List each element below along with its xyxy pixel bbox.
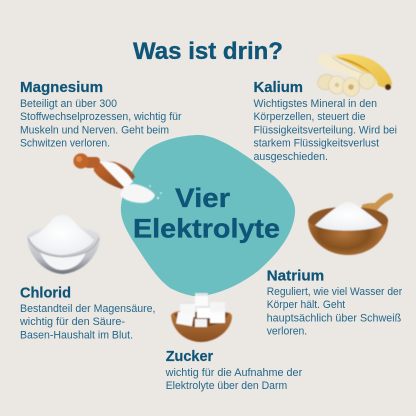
panel: Magnesium (20, 79, 182, 150)
panel: Natrium: Reguliert, wie viel Wasser der (267, 286, 403, 298)
panel: Kalium: Flüssigkeitsverteilung. Wird bei (254, 124, 397, 136)
panel: Zucker: Zucker (166, 348, 213, 365)
panel: Chlorid: Chlorid (20, 284, 71, 302)
panel: Natrium: verloren. (267, 326, 307, 338)
panel: Magnesium: Magnesium (20, 79, 103, 96)
icon: banana (315, 53, 392, 96)
panel: Natrium: Natrium (267, 268, 324, 284)
panel: Magnesium: Beteiligt an über 300 (20, 98, 117, 110)
panel: Chlorid: Basen-Haushalt im Blut. (20, 329, 133, 341)
panel: Zucker (165, 348, 303, 392)
central teal blob (121, 135, 295, 296)
panel: Kalium: starkem Flüssigkeitsverlust (254, 138, 379, 150)
panel: Kalium: Kalium (254, 79, 303, 96)
center heading: Vier Elektrolyte: Vier (175, 183, 231, 213)
panel: Natrium: Körper hält. Geht (267, 299, 345, 311)
panel: Zucker: wichtig für die Aufnahme der (165, 367, 303, 379)
panel: Kalium: Wichtigstes Mineral in den (254, 98, 377, 110)
icon: wooden scoop with salt (73, 153, 162, 203)
icon: wooden bowl with salt (308, 193, 393, 255)
panel: Magnesium: Schwitzen verloren. (20, 138, 110, 150)
panel: Kalium (254, 79, 397, 163)
panel: Magnesium: Muskeln und Nerven. Geht beim (20, 124, 169, 136)
panel: Natrium (267, 268, 403, 338)
center heading: Vier Elektrolyte (133, 183, 280, 244)
panel: Chlorid (19, 284, 155, 341)
icon: glass bowl with salt (27, 215, 100, 274)
panel: Magnesium: Stoffwechselprozessen, wichtig für (20, 111, 182, 123)
icon: wooden bowl with sugar cubes (171, 293, 232, 342)
panel: Zucker: Elektrolyte über den Darm (166, 380, 287, 392)
title: Was ist drin? (133, 38, 283, 65)
panel: Chlorid: wichtig für den Säure- (19, 316, 125, 328)
center heading: Vier Elektrolyte: Elektrolyte (133, 214, 280, 244)
panel: Chlorid: Bestandteil der Magensäure, (20, 303, 156, 315)
panel: Kalium: ausgeschieden. (254, 151, 328, 163)
panel: Kalium: Körperzellen, steuert die (254, 111, 366, 123)
panel: Natrium: hauptsächlich über Schweiß (267, 312, 402, 324)
